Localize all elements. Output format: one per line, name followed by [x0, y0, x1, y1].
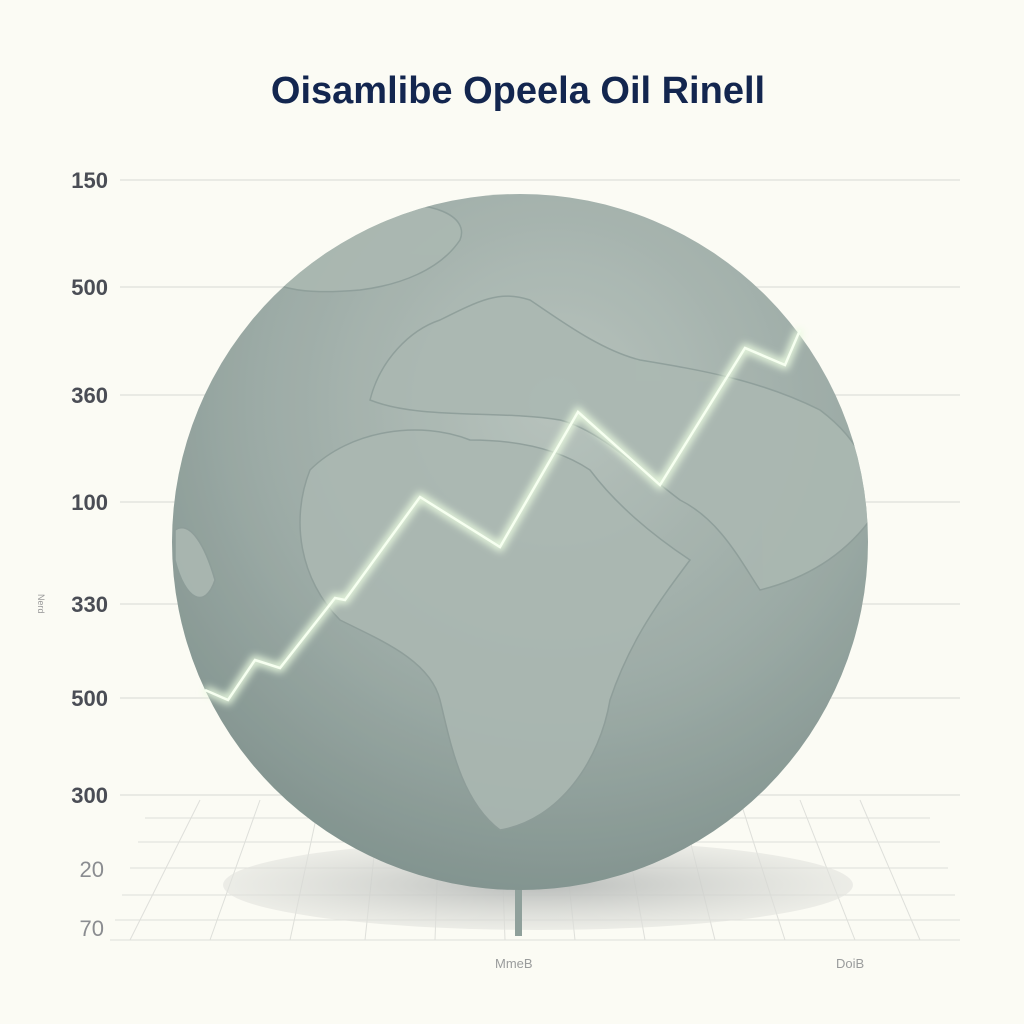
- trend line: [205, 330, 800, 700]
- y axis labels: [71, 168, 108, 941]
- globe: [172, 194, 873, 890]
- globe shadow: [223, 840, 853, 930]
- dark lower shading: [172, 194, 868, 890]
- x axis labels: DoiB: [836, 956, 864, 971]
- y axis labels: 70: [80, 916, 104, 941]
- continents: [175, 204, 873, 830]
- floor grid: [110, 800, 960, 940]
- y axis labels: 150: [71, 168, 108, 193]
- y axis labels: 330: [71, 592, 108, 617]
- y axis labels: 100: [71, 490, 108, 515]
- y axis labels: 500: [71, 275, 108, 300]
- y axis labels: 500: [71, 686, 108, 711]
- x axis labels: [495, 956, 864, 971]
- y axis labels: 20: [80, 857, 104, 882]
- axis title: Nerd: [36, 594, 46, 614]
- globe stand: [515, 880, 522, 936]
- x axis labels: MmeB: [495, 956, 533, 971]
- title: Oisamlibe Opeela Oil Rinell: [271, 70, 765, 112]
- y axis labels: 300: [71, 783, 108, 808]
- y axis labels: 360: [71, 383, 108, 408]
- y axis gridlines: [120, 180, 960, 795]
